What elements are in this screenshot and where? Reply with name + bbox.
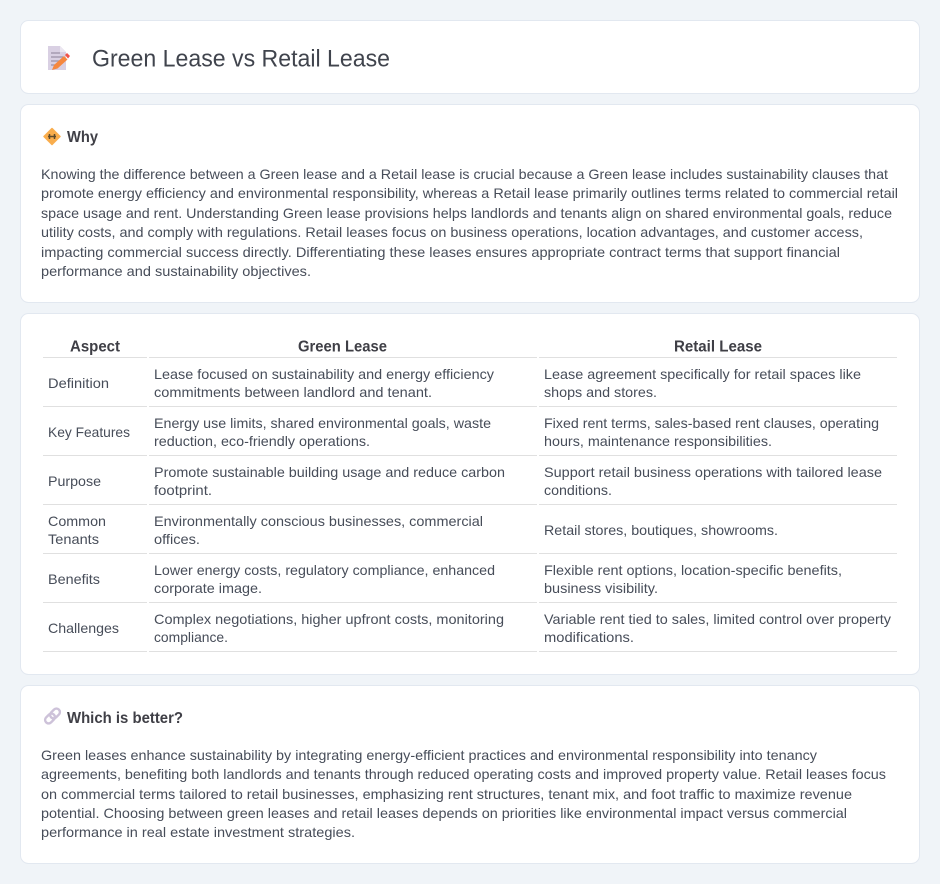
table row: definition: shops and stores. <box>544 384 657 400</box>
icon: diamond sign <box>44 128 60 144</box>
table row: purpose <box>48 464 882 498</box>
table row: common tenants: Environmentally conscious businesses, commercial <box>154 513 483 529</box>
table row: key features: Key Features <box>48 424 130 440</box>
table row: purpose: footprint. <box>154 482 212 498</box>
table row: challenges: compliance. <box>154 629 228 645</box>
title: Green Lease vs Retail Lease <box>92 46 390 72</box>
icon: chain link <box>44 707 61 725</box>
panel: which is better <box>20 686 920 864</box>
table row: benefits: business visibility. <box>544 580 658 596</box>
table row: benefits <box>48 562 842 596</box>
table row: challenges: Variable rent tied to sales, limited control over property <box>544 611 891 627</box>
table row: benefits: Benefits <box>48 571 100 587</box>
table header row <box>70 338 762 356</box>
table row: challenges: modifications. <box>544 629 634 645</box>
panel: title header <box>20 20 920 94</box>
table row: key features: Fixed rent terms, sales-based rent clauses, operating <box>544 415 879 431</box>
panel: comparison table <box>20 314 920 674</box>
text block: which is better paragraph: agreements, benefiting both landlords and tenants through reduced operating costs and improved property value. Retail leases focus <box>41 766 886 782</box>
table row: purpose: Promote sustainable building usage and reduce carbon <box>154 464 505 480</box>
text block: which is better paragraph <box>41 747 886 840</box>
text block: which is better paragraph: Green leases enhance sustainability by integrating energy-efficient practices and environmental responsibility into tenancy <box>41 747 817 763</box>
table row: benefits: corporate image. <box>154 580 262 596</box>
text block: why paragraph: performance and sustainability objectives. <box>41 263 311 279</box>
table row: definition <box>48 366 861 400</box>
table row: purpose: conditions. <box>544 482 612 498</box>
table row: benefits: Flexible rent options, location-specific benefits, <box>544 562 842 578</box>
panel: why <box>20 104 920 302</box>
table row: challenges: Complex negotiations, higher upfront costs, monitoring <box>154 611 504 627</box>
table row: common tenants: Retail stores, boutiques, showrooms. <box>544 522 778 538</box>
table row: common tenants <box>48 513 778 547</box>
text block: why paragraph <box>41 166 898 279</box>
table row: purpose: Support retail business operations with tailored lease <box>544 464 882 480</box>
table row: benefits: Lower energy costs, regulatory compliance, enhanced <box>154 562 495 578</box>
text block: which is better paragraph: performance in real estate investment strategies. <box>41 824 355 840</box>
heading: which is better: Which is better? <box>67 710 183 727</box>
text block: why paragraph: promote energy efficiency and environmental responsibility, whereas a Retail lease primarily outlines terms related to commercial retail <box>41 185 898 201</box>
table row: key features: Energy use limits, shared environmental goals, waste <box>154 415 491 431</box>
table header row: Retail Lease <box>674 338 762 356</box>
table row: challenges <box>48 611 891 645</box>
table row: definition: commitments between landlord and tenant. <box>154 384 432 400</box>
table row: key features: reduction, eco-friendly operations. <box>154 433 370 449</box>
text block: why paragraph: utility costs, and comply with regulations. Retail leases focus on business operations, location advantages, and customer access, <box>41 224 863 240</box>
table header row: Aspect <box>70 338 121 356</box>
table row: key features: hours, maintenance responsibilities. <box>544 433 772 449</box>
text block: why paragraph: impacting commercial success directly. Differentiating these leases ensures appropriate contract terms that support financial <box>41 244 840 260</box>
table row: definition: Lease agreement specifically for retail spaces like <box>544 366 861 382</box>
text block: which is better paragraph: potential. Choosing between green leases and retail leases depends on priorities like environmental impact versus commercial <box>41 805 847 821</box>
table row: purpose: Purpose <box>48 473 101 489</box>
table row: key features <box>48 415 879 449</box>
icon: document with pencil <box>48 46 70 70</box>
table row: challenges: Challenges <box>48 620 119 636</box>
text block: why paragraph: space usage and rent. Understanding Green lease provisions helps landlords and tenants align on shared environmental goals, reduce <box>41 205 892 221</box>
table row: definition: Definition <box>48 375 109 391</box>
text block: why paragraph: Knowing the difference between a Green lease and a Retail lease is crucial because a Green lease includes sustainability clauses that <box>41 166 888 182</box>
text block: which is better paragraph: on commercial terms tailored to retail businesses, emphasizing rent structures, tenant mix, and foot traffic to maximize revenue <box>41 786 852 802</box>
table row: common tenants: Tenants <box>48 531 99 547</box>
table row: common tenants: offices. <box>154 531 200 547</box>
heading: why: Why <box>67 129 98 146</box>
table header row: Green Lease <box>298 338 387 356</box>
table row: definition: Lease focused on sustainability and energy efficiency <box>154 366 494 382</box>
table row: common tenants: Common <box>48 513 106 529</box>
